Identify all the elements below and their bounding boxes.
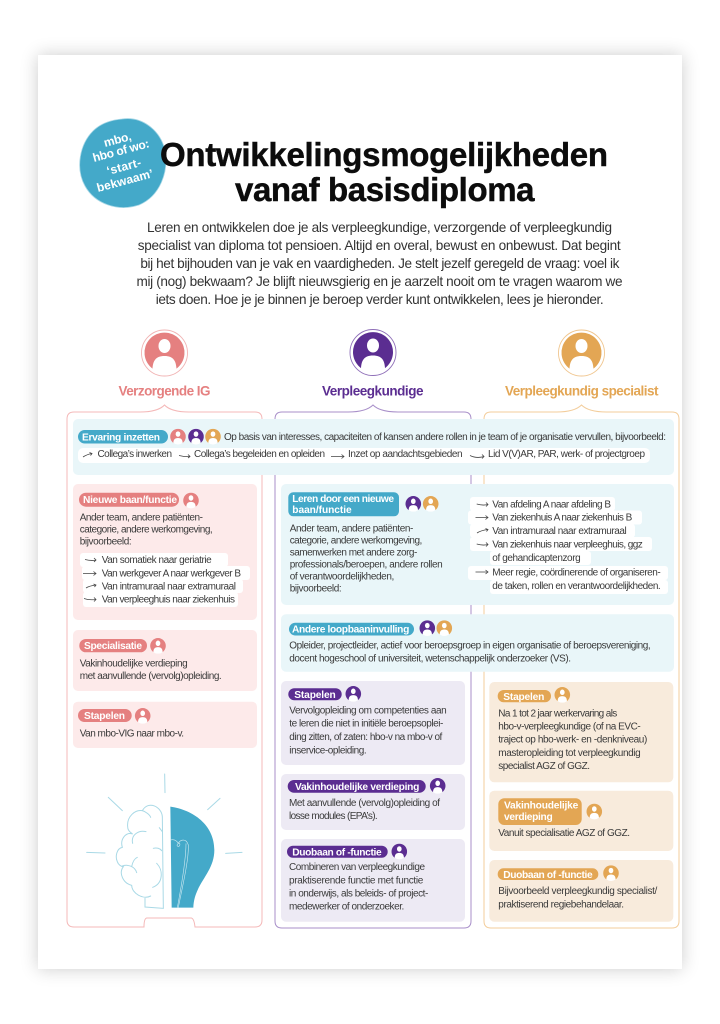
text: met aanvullende (vervolg)opleiding.: [80, 671, 222, 682]
pill: Duobaan of -functie: [503, 870, 593, 881]
badge: mbo, hbo of wo startbekwaam: mbo,: [102, 129, 133, 150]
frame: verzorgende IG: [67, 405, 262, 927]
intro text: specialist van diploma tot pensioen. Altijd en overal, bewust en onbewust. Dat begint: [138, 238, 621, 253]
text: Combineren van verpleegkundige: [289, 862, 425, 873]
text: categorie, andere werkomgeving,: [290, 536, 422, 547]
list: Van somatiek naar geriatrie: [102, 555, 212, 566]
panel: stapelen specialist: [489, 682, 673, 782]
pill: Vakinhoudelijke: [504, 800, 579, 812]
text: Ander team, andere patiënten-: [290, 524, 413, 535]
pill: [498, 798, 582, 825]
text: praktiserende functie met functie: [289, 875, 424, 886]
pill: Stapelen: [84, 711, 125, 722]
intro text: iets doen. Hoe je je binnen je beroep verder kunt ontwikkelen, lees je hieronder.: [156, 292, 604, 307]
badge: mbo, hbo of wo startbekwaam: bekwaam’: [95, 166, 155, 195]
pill: Nieuwe baan/functie: [83, 495, 177, 506]
heading: verpleegkundige: Verpleegkundige: [322, 384, 424, 398]
pill: Duobaan of -functie: [292, 847, 382, 858]
text: masteropleiding tot verpleegkundig: [498, 748, 641, 759]
list: Van verpleeghuis naar ziekenhuis: [102, 595, 235, 606]
text: ding zitten, of zaten: hbo-v na mbo-v of: [289, 732, 443, 743]
list: Van werkgever A naar werkgever B: [102, 569, 241, 580]
icon: [135, 708, 150, 724]
badge: mbo, hbo of wo startbekwaam: [80, 119, 166, 208]
text: traject op hbo-werk- en -denkniveau): [498, 735, 647, 746]
icon: [586, 804, 602, 819]
pill: verdieping: [504, 812, 553, 823]
pill: ervaring inzetten: Ervaring inzetten: [82, 432, 160, 444]
list: [468, 497, 668, 594]
text: Vakinhoudelijke verdieping: [80, 659, 188, 670]
text: in onderwijs, als beleids- of project-: [289, 889, 428, 900]
list: Van ziekenhuis naar verpleeghuis, ggz: [492, 540, 643, 551]
icon: [554, 687, 570, 703]
text: losse modules (EPA’s).: [289, 811, 378, 822]
pill: Vakinhoudelijke verdieping: [295, 782, 419, 793]
pill: Leren door een nieuwe: [292, 494, 394, 505]
text: [498, 886, 658, 910]
text: [290, 524, 443, 595]
panel: andere loopbaaninvulling: [281, 614, 674, 672]
text: Van mbo-VIG naar mbo-v.: [80, 729, 184, 740]
pill: Specialisatie: [84, 641, 142, 652]
list: Meer regie, coördinerende of organiseren-: [492, 568, 661, 579]
text: Bijvoorbeeld verpleegkundig specialist/: [498, 886, 658, 897]
list: de taken, rollen en verantwoordelijkheden.: [492, 581, 661, 592]
heading: verzorgende IG: Verzorgende IG: [118, 384, 210, 398]
intro text: Leren en ontwikkelen doe je als verpleegkundige, verzorgende of verpleegkundig: [147, 220, 612, 235]
pill: [288, 492, 399, 516]
list: ervaring inzetten: Collega’s inwerken: [98, 449, 172, 460]
panel: stapelen verzorgende: [73, 702, 257, 748]
text: [80, 659, 222, 682]
badge: mbo, hbo of wo startbekwaam: hbo of wo:: [91, 136, 151, 165]
icon: verpleegkundige: [350, 330, 396, 376]
text: of verantwoordelijkheden,: [290, 572, 394, 583]
text: Na 1 tot 2 jaar werkervaring als: [498, 709, 617, 720]
icons: drie rollen: [170, 429, 221, 444]
list: ervaring inzetten: [78, 448, 650, 463]
badge: mbo, hbo of wo startbekwaam: ‘start-: [105, 155, 143, 178]
intro text: bij het bijhouden van je vak en vaardigheden. Je stelt jezelf geregeld de vraag: voel ik: [140, 256, 620, 271]
icon: [430, 778, 446, 794]
text: inservice-opleiding.: [289, 745, 367, 756]
text: te leren die niet in initiële beroepsoplei-: [289, 719, 443, 730]
list: [80, 553, 250, 607]
pill: Stapelen: [503, 692, 544, 703]
icon: verzorgende IG: [142, 330, 188, 376]
pill: baan/functie: [292, 505, 352, 516]
intro text: [136, 220, 622, 307]
list: ervaring inzetten: Collega’s begeleiden en opleiden: [194, 449, 325, 460]
title: [160, 136, 608, 208]
icon: [150, 638, 166, 654]
frame: verpleegkundige: [275, 405, 471, 928]
text: [80, 513, 213, 548]
text: [289, 705, 447, 756]
panel: stapelen verpleegkundige: [281, 681, 465, 765]
icon: [346, 686, 361, 702]
text: medewerker of onderzoeker.: [289, 902, 404, 912]
text: bijvoorbeeld:: [80, 536, 132, 548]
icons: [420, 620, 452, 636]
text: praktiserend regiebehandelaar.: [498, 899, 624, 910]
icon: [183, 493, 199, 508]
pill: Andere loopbaaninvulling: [292, 624, 409, 636]
panel: nieuwe baan/functie: [73, 484, 257, 620]
text: [498, 709, 647, 772]
page background card: [38, 55, 682, 969]
frame: verpleegkundig specialist: [484, 405, 679, 928]
pill: [288, 688, 342, 701]
heading: verpleegkundig specialist: Verpleegkundig specialist: [505, 384, 659, 398]
icon: [603, 865, 619, 881]
panel: vakinhoudelijke verdieping verpleegkundige: [281, 774, 465, 830]
text: Opleider, projectleider, actief voor beroepsgroep in eigen organisatie of beroepsvereniging,: [289, 640, 651, 651]
text: [289, 798, 440, 822]
icon: brein en gloeilamp: [87, 774, 242, 908]
text: [289, 862, 428, 912]
text: Ander team, andere patiënten-: [80, 513, 203, 524]
text: Vervolgopleiding om competenties aan: [289, 705, 447, 716]
intro text: mij (nog) bekwaam? Je blijft nieuwsgierig en je aarzelt nooit om te vragen waarom we: [136, 274, 622, 289]
text: [289, 640, 651, 665]
icon: verpleegkundig specialist: [558, 330, 604, 376]
list: Van afdeling A naar afdeling B: [492, 499, 611, 510]
text: docent hogeschool of universiteit, wetenschappelijk onderzoeker (VS).: [289, 654, 571, 665]
text: hbo-v-verpleegkundige (of na EVC-: [498, 722, 641, 733]
text: Vanuit specialisatie AGZ of GGZ.: [498, 828, 630, 839]
title: vanaf basisdiploma: [235, 171, 535, 208]
title: Ontwikkelingsmogelijkheden: [160, 136, 608, 173]
panel: leren door een nieuwe baan/functie: [281, 484, 674, 605]
list: ervaring inzetten: Lid V(V)AR, PAR, werk- of projectgroep: [488, 449, 645, 460]
text: categorie, andere werkomgeving,: [80, 524, 213, 536]
text: specialist AGZ of GGZ.: [498, 761, 590, 772]
pill: [498, 690, 551, 703]
list: ervaring inzetten: Inzet op aandachtsgebieden: [348, 449, 462, 460]
panel: duobaan specialist: [489, 860, 673, 922]
pill: [78, 709, 132, 722]
list: Van intramuraal naar extramuraal: [102, 582, 236, 593]
panel: duobaan verpleegkundige: [281, 839, 465, 922]
text: ervaring inzetten: Op basis van interesses, capaciteiten of kansen andere rollen in je team of je organisatie vervullen, bijvoorbeeld:: [224, 432, 666, 443]
list: Van ziekenhuis A naar ziekenhuis B: [492, 513, 633, 524]
list: Van intramuraal naar extramuraal: [492, 526, 627, 537]
panel: specialisatie: [73, 630, 257, 691]
icons: [406, 496, 438, 512]
pill: Stapelen: [294, 690, 336, 701]
panel: vakinhoudelijke verdieping specialist: [489, 791, 673, 851]
icon: [392, 844, 407, 859]
text: Met aanvullende (vervolg)opleiding of: [289, 798, 440, 809]
panel: ervaring inzetten: [73, 419, 674, 475]
text: samenwerken met andere zorg-: [290, 548, 417, 558]
text: professionals/beroepen, andere rollen: [290, 560, 443, 571]
text: bijvoorbeeld:: [290, 584, 342, 595]
list: of gehandicaptenzorg: [492, 553, 581, 564]
